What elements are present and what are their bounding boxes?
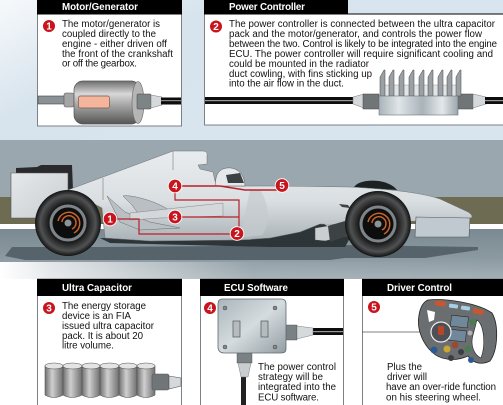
panel: power controller: [204, 0, 503, 125]
panel: driver control: [362, 279, 503, 405]
car callout 2: [230, 227, 244, 240]
badge 3: [43, 302, 55, 314]
power controller heading: Power Controller: [229, 2, 305, 13]
car shadow: [5, 245, 478, 260]
ultra capacitor heading: [37, 279, 182, 296]
badge 5: [368, 301, 380, 314]
motor/generator text: or off the gearbox.: [62, 58, 137, 70]
front wing and suspension: [315, 204, 470, 242]
power controller text: The power controller is connected between the ultra capacitor: [229, 19, 496, 30]
ultra capacitor text: pack. It is about 20: [62, 331, 144, 342]
front wheel: [345, 191, 411, 257]
car callout 3: [168, 210, 182, 224]
far front tyre: [354, 181, 397, 190]
rear wheel: [35, 190, 101, 256]
icon: ECU box: [218, 299, 343, 405]
ultra capacitor text: litre volume.: [62, 340, 114, 352]
ECU software text: The power control: [258, 362, 336, 373]
ECU software text: strategy will be: [258, 372, 323, 383]
ECU software heading: ECU Software: [224, 283, 289, 294]
panel: ECU software: [200, 279, 344, 405]
badge 2: 2: [213, 22, 219, 33]
icon: steering wheel: [418, 300, 497, 363]
motor/generator text: The motor/generator is: [62, 19, 160, 30]
ultra capacitor text: issued ultra capacitor: [62, 321, 155, 332]
power controller text: duct cowling, with fins sticking up: [229, 69, 372, 80]
car illustration: [5, 151, 478, 260]
driver control text: on his steering wheel.: [386, 392, 481, 404]
ultra capacitor text: device is an FIA: [62, 311, 132, 322]
motor/generator text: [62, 19, 173, 70]
motor/generator text: the front of the crankshaft: [62, 49, 173, 60]
power controller text: pack and the motor/generator, and controls the power flow: [229, 29, 483, 40]
power controller text: ECU. The power controller will require significant cooling and: [229, 49, 493, 60]
power controller text: into the air flow in the duct.: [229, 78, 344, 90]
motor/generator heading: Motor/Generator: [62, 2, 138, 13]
power controller text: between the two. Control is likely to be integrated into the engine: [229, 39, 497, 50]
ultra capacitor text: [62, 301, 155, 352]
car callout 1: 1: [107, 214, 113, 226]
driver control text: driver will: [387, 372, 427, 383]
ultra capacitor text: The energy storage: [62, 301, 146, 312]
ECU software heading: [200, 279, 344, 296]
power controller text: could be mounted in the radiator: [229, 59, 370, 70]
connector lines on car: [110, 186, 282, 234]
car callout 1: [103, 212, 117, 226]
pointer line to steering wheel: [362, 331, 432, 333]
ultra capacitor heading: Ultra Capacitor: [62, 283, 132, 294]
badge 4: [204, 302, 216, 314]
icon: motor cylinder: [38, 81, 181, 124]
driver control text: have an over-ride function: [386, 382, 496, 393]
rear wing: [11, 165, 73, 218]
car callout 3: 3: [172, 212, 178, 224]
power controller text: [229, 19, 497, 90]
car callout 5: [275, 179, 289, 192]
car callout 4: 4: [172, 182, 178, 192]
driver control heading: Driver Control: [387, 283, 452, 294]
motor/generator text: engine - either driven off: [62, 39, 167, 50]
panel: motor/generator: [37, 0, 182, 126]
car scene background: [0, 140, 503, 405]
icon: power controller with cooling fins: [205, 70, 503, 115]
ECU software text: integrated into the: [258, 382, 336, 393]
badge 1: [43, 20, 55, 32]
badge 2: [210, 20, 222, 33]
power controller heading: [204, 0, 503, 14]
driver control text: [386, 362, 496, 404]
badge 3: 3: [46, 304, 52, 314]
badge 4: 4: [207, 304, 213, 314]
badge 1: 1: [46, 22, 52, 32]
ECU software text: [258, 362, 336, 404]
car callout 5: 5: [279, 181, 285, 192]
motor/generator text: coupled directly to the: [62, 29, 156, 40]
helmet: [216, 168, 245, 186]
badge 5: 5: [371, 302, 377, 314]
panel: ultra capacitor: [37, 279, 182, 405]
car body: [68, 151, 472, 241]
icon: capacitor cells: [45, 363, 181, 398]
under floor: [100, 222, 350, 247]
ECU software text: ECU software.: [258, 392, 319, 404]
driver control text: Plus the: [387, 362, 422, 373]
motor/generator heading: [37, 0, 182, 14]
car callout 2: 2: [234, 229, 240, 240]
driver control heading: [362, 279, 503, 296]
car callout 4: [168, 179, 182, 193]
